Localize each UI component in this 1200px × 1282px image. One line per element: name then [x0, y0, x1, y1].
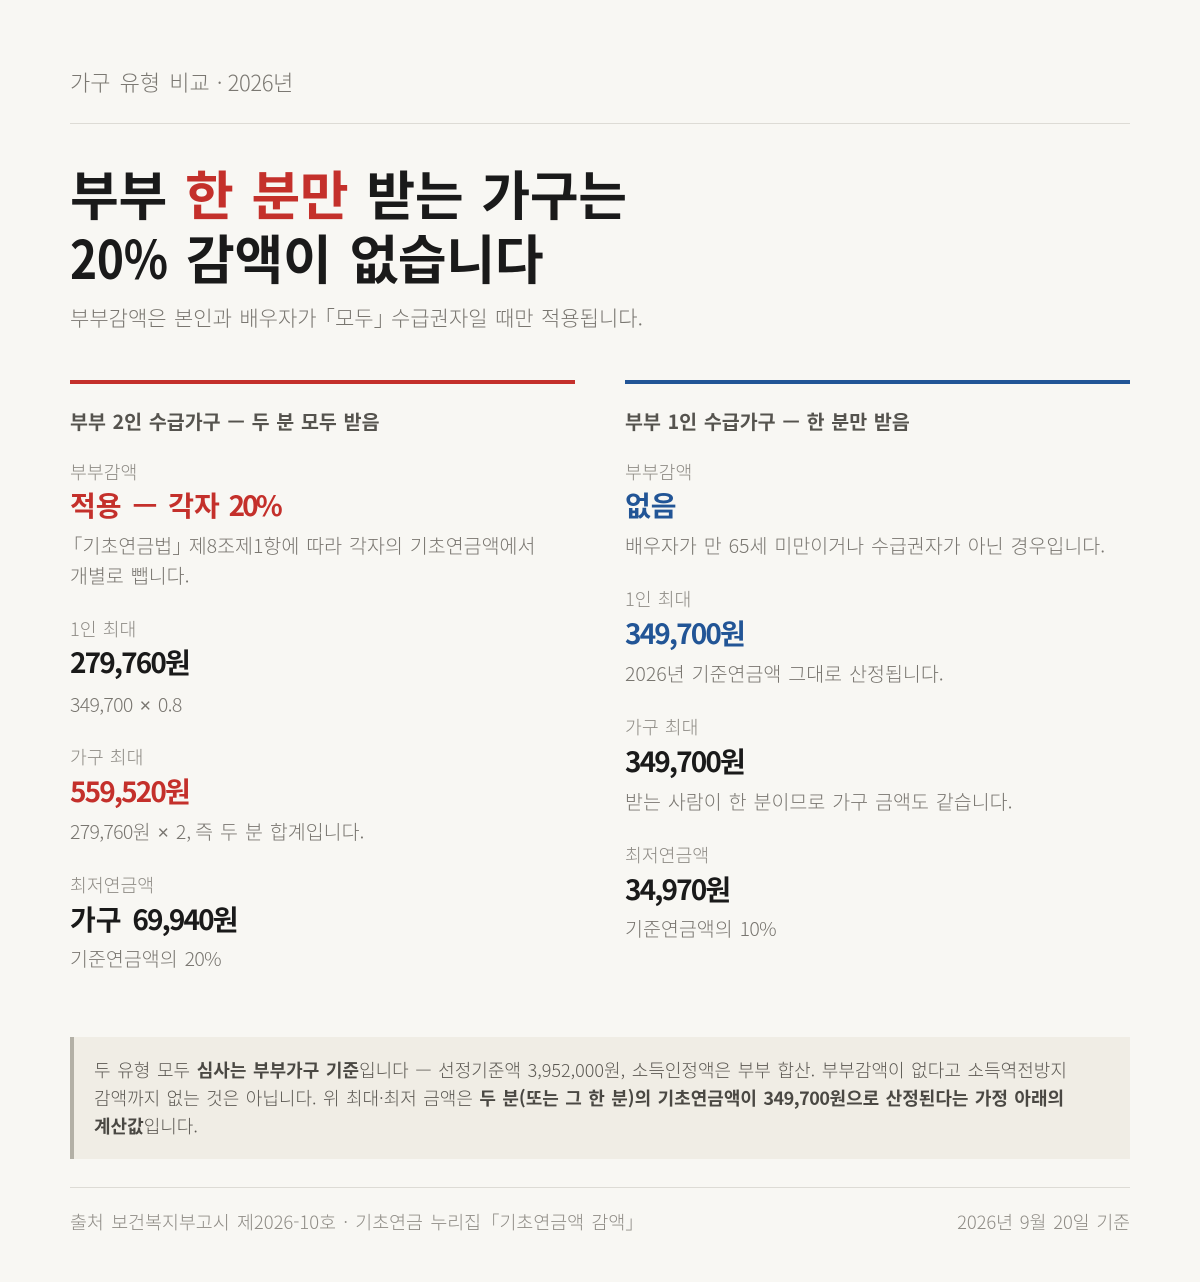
panel: two-recipient household — [63, 380, 575, 972]
description: sum: 279,760원 × 2, 즉 두 분 합계입니다. — [70, 816, 364, 845]
description: legal basis — [63, 530, 535, 589]
label: household max: 가구 최대 — [625, 714, 698, 740]
header rule — [70, 123, 1130, 124]
callout text: 감액까지 없는 것은 아닙니다. 위 최대·최저 금액은 두 분(또는 그 한 분)의 기초연금액이 349,700원으로 산정된다는 가정 아래의 — [94, 1085, 1064, 1111]
label: one person max: 1인 최대 — [625, 586, 691, 612]
callout text: 두 유형 모두 심사는 부부가구 기준입니다 — 선정기준액 3,952,000원, 소득인정액은 부부 합산. 부부감액이 없다고 소득역전방지 — [94, 1057, 1067, 1083]
description: legal basis: 「기초연금법」 제8조제1항에 따라 각자의 기초연금액에서 — [63, 530, 535, 559]
value: 34,970: 34,970원 — [625, 869, 731, 909]
footer rule — [70, 1187, 1130, 1188]
title — [70, 155, 627, 295]
footer source: 출처 보건복지부고시 제2026-10호 · 기초연금 누리집「기초연금액 감액」 — [70, 1209, 644, 1235]
label: couple reduction: 부부감액 — [625, 459, 692, 485]
description: base amount: 2026년 기준연금액 그대로 산정됩니다. — [625, 658, 944, 687]
description: 20 percent: 기준연금액의 20% — [70, 943, 221, 972]
value: 349,700: 349,700원 — [625, 613, 746, 653]
panel: one-recipient household — [625, 380, 1130, 942]
description: legal basis: 개별로 뺍니다. — [70, 560, 190, 589]
title: 부부 한 분만 받는 가구는 — [70, 155, 627, 231]
panel heading: 부부 2인 수급가구 — 두 분 모두 받음 — [70, 406, 380, 435]
value: none: 없음 — [625, 485, 677, 525]
callout text — [94, 1057, 1067, 1139]
description: reason: 배우자가 만 65세 미만이거나 수급권자가 아닌 경우입니다. — [625, 530, 1105, 559]
panel rule: blue — [625, 380, 1130, 384]
panel heading: 부부 1인 수급가구 — 한 분만 받음 — [625, 406, 910, 435]
label: minimum pension: 최저연금액 — [70, 872, 154, 898]
label: household max: 가구 최대 — [70, 744, 143, 770]
callout text: 계산값입니다. — [94, 1113, 198, 1139]
value: applied: 적용 — 각자 20% — [70, 485, 280, 525]
label: couple reduction: 부부감액 — [70, 459, 137, 485]
callout accent bar — [70, 1037, 74, 1159]
subtitle: 부부감액은 본인과 배우자가 「모두」 수급권자일 때만 적용됩니다. — [70, 303, 643, 333]
value: 559,520: 559,520원 — [70, 771, 191, 811]
callout note — [70, 1037, 1130, 1159]
title: 20% — [70, 219, 168, 295]
value: 279,760: 279,760원 — [70, 642, 191, 682]
title: 감액이 없습니다 — [186, 219, 543, 295]
value: 349,700: 349,700원 — [625, 741, 746, 781]
value: 69,940: 가구 69,940원 — [70, 899, 238, 939]
description: formula: 349,700 × 0.8 — [70, 689, 182, 718]
footer date: 2026년 9월 20일 기준 — [957, 1209, 1130, 1235]
label: minimum pension: 최저연금액 — [625, 842, 709, 868]
description: 10 percent: 기준연금액의 10% — [625, 913, 776, 942]
panel rule: red — [70, 380, 575, 384]
label: one person max: 1인 최대 — [70, 616, 136, 642]
kicker: 가구 유형 비교 · 2026년 — [70, 66, 293, 98]
description: same amount: 받는 사람이 한 분이므로 가구 금액도 같습니다. — [625, 786, 1013, 815]
